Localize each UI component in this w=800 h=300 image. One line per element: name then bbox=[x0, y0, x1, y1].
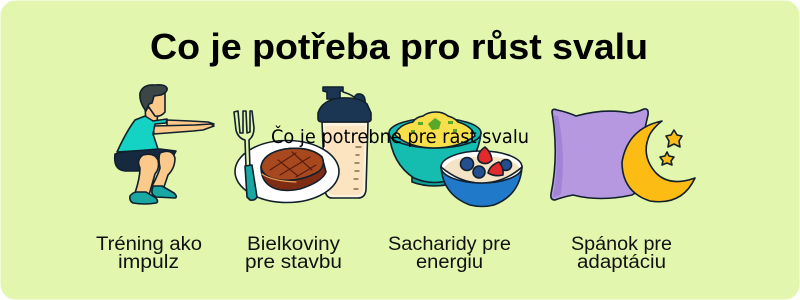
icon: steak on plate bbox=[234, 87, 371, 202]
blue bowl bbox=[441, 147, 522, 206]
label: training bbox=[96, 234, 202, 273]
overlay caption: Čo je potrebne pre rast svalu bbox=[271, 124, 529, 148]
label: carbohydrates bbox=[388, 234, 511, 273]
icon: bowls of rice and oatmeal bbox=[389, 112, 522, 206]
label: protein: Bielkoviny bbox=[247, 234, 341, 255]
title: Co je potřeba pro růst svalu bbox=[150, 26, 648, 67]
green bowl bbox=[389, 112, 481, 186]
label: protein: pre stavbu bbox=[245, 252, 342, 273]
label: carbohydrates: Sacharidy pre bbox=[388, 234, 511, 255]
label: sleep bbox=[571, 234, 672, 273]
plate bbox=[235, 140, 339, 202]
steak bbox=[261, 148, 326, 190]
label: sleep: Spánok pre bbox=[571, 234, 672, 255]
moon bbox=[622, 121, 695, 202]
label: carbohydrates: energiu bbox=[416, 252, 483, 273]
icon: squatting man bbox=[115, 85, 214, 204]
shaker bottle bbox=[318, 87, 371, 198]
label: sleep: adaptáciu bbox=[577, 252, 666, 273]
icon: pillow and moon bbox=[551, 109, 695, 202]
label: protein bbox=[245, 234, 342, 273]
label: training: Tréning ako bbox=[96, 234, 202, 255]
fork bbox=[234, 111, 257, 200]
pillow bbox=[551, 109, 648, 200]
label: training: impulz bbox=[118, 252, 179, 273]
stars bbox=[660, 130, 682, 165]
